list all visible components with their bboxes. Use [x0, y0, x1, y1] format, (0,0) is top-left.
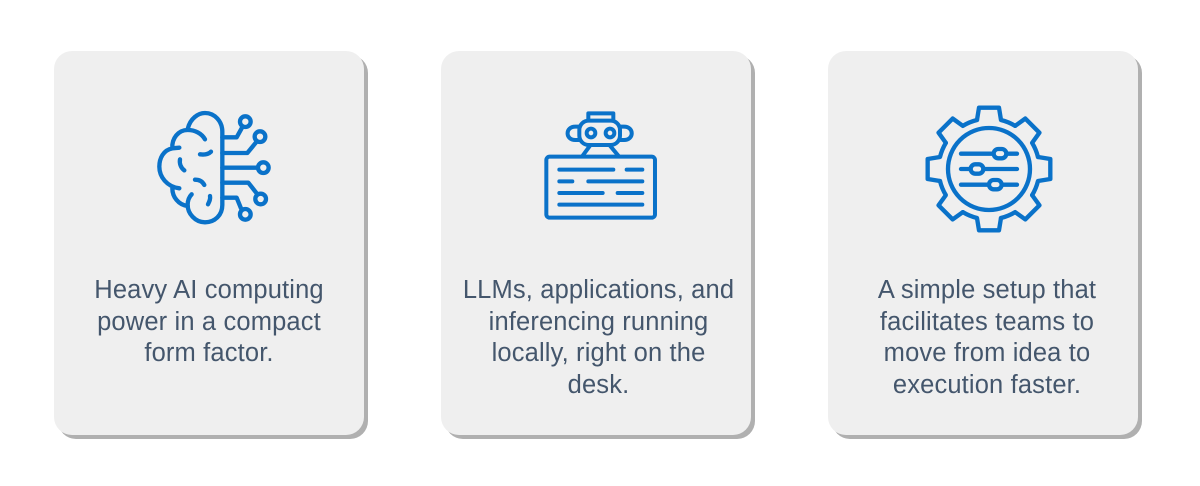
- text: local LLMs: LLMs, applications, and: [463, 276, 734, 304]
- text: local LLMs: inferencing running: [489, 308, 708, 336]
- text: simple setup: [878, 276, 1096, 398]
- text: compact computing power: [94, 276, 324, 367]
- panel: simple setup: [828, 51, 1138, 435]
- text: local LLMs: desk.: [568, 370, 629, 398]
- panel: local LLMs: [441, 51, 751, 435]
- icon: gear with sliders: [926, 106, 1052, 232]
- text: compact computing power: form factor.: [144, 339, 274, 367]
- text: simple setup: move from idea to: [884, 339, 1090, 367]
- text: simple setup: A simple setup that: [878, 276, 1096, 304]
- text: compact computing power: Heavy AI computing: [94, 276, 324, 304]
- panel: compact computing power: [54, 51, 364, 435]
- text: local LLMs: [463, 276, 734, 398]
- text: local LLMs: locally, right on the: [492, 339, 705, 367]
- text: simple setup: execution faster.: [893, 370, 1081, 398]
- text: compact computing power: power in a compact: [97, 308, 321, 336]
- icon: robot over panel: [544, 111, 657, 220]
- text: simple setup: facilitates teams to: [880, 308, 1094, 336]
- icon: brain circuit: [157, 110, 271, 224]
